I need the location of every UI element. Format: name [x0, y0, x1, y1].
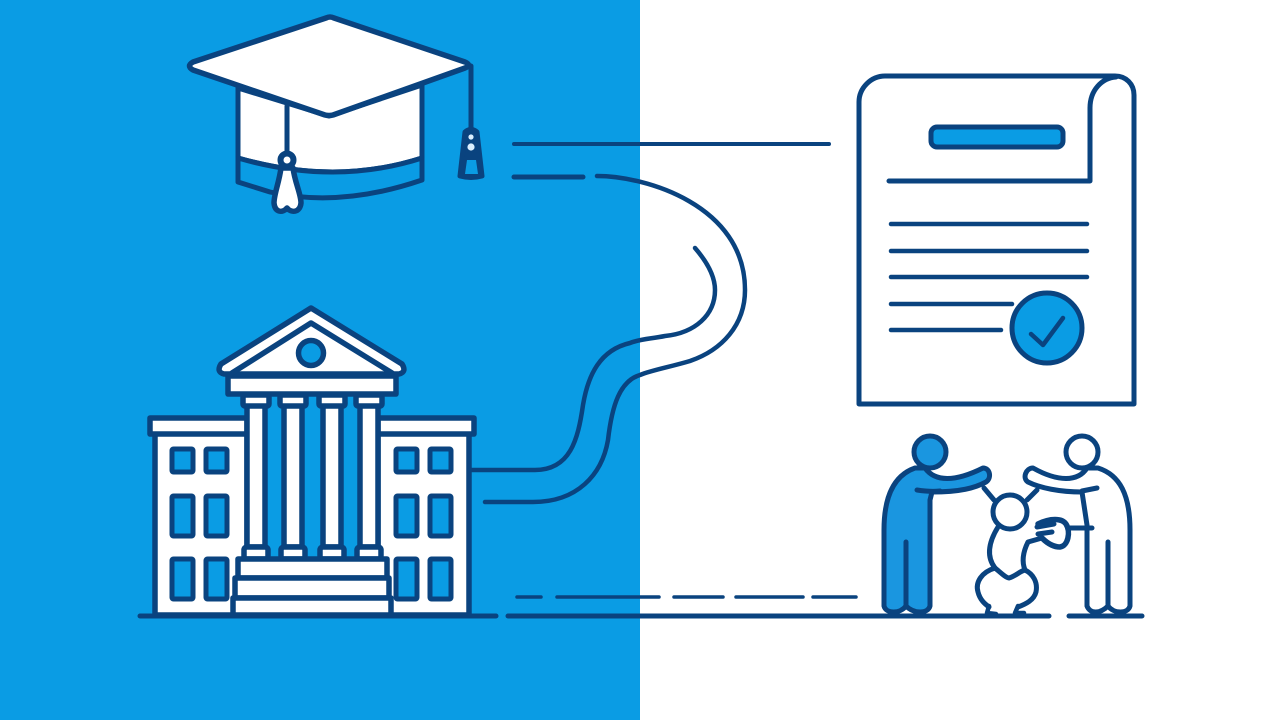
- icon: graduation cap: [190, 17, 482, 211]
- pediment medallion: [298, 340, 324, 366]
- columns: [243, 395, 382, 559]
- connector: top straight line: [514, 142, 829, 146]
- left wing: [150, 418, 247, 615]
- connector: outer curve: [485, 176, 745, 502]
- connector: dashed ground line: [517, 595, 856, 599]
- left tassel: [274, 106, 301, 211]
- steps: [233, 559, 391, 615]
- left adult: [884, 436, 990, 612]
- pediment: [219, 308, 404, 374]
- cap band: [238, 158, 422, 198]
- page fold: [889, 77, 1116, 181]
- right tassel: [460, 66, 482, 178]
- icon: university building: [150, 308, 474, 615]
- text lines: [891, 224, 1087, 330]
- cap body: [238, 85, 422, 172]
- child: [977, 488, 1092, 614]
- icon: family group: [884, 436, 1130, 614]
- page outline: [859, 76, 1134, 404]
- panel: blue left background: [0, 0, 640, 720]
- right adult: [1025, 436, 1130, 612]
- portico opening: [245, 400, 380, 560]
- connector: dashed start of outer curve: [514, 174, 583, 180]
- title bar: [931, 127, 1063, 147]
- connector: inner curve: [470, 248, 715, 470]
- check seal: [1012, 293, 1082, 363]
- entablature: [228, 376, 396, 394]
- pediment inner line: [232, 323, 392, 373]
- right wing: [378, 418, 474, 615]
- icon: certified document: [859, 76, 1134, 404]
- cap top board: [190, 17, 468, 116]
- ground line: [140, 614, 1142, 618]
